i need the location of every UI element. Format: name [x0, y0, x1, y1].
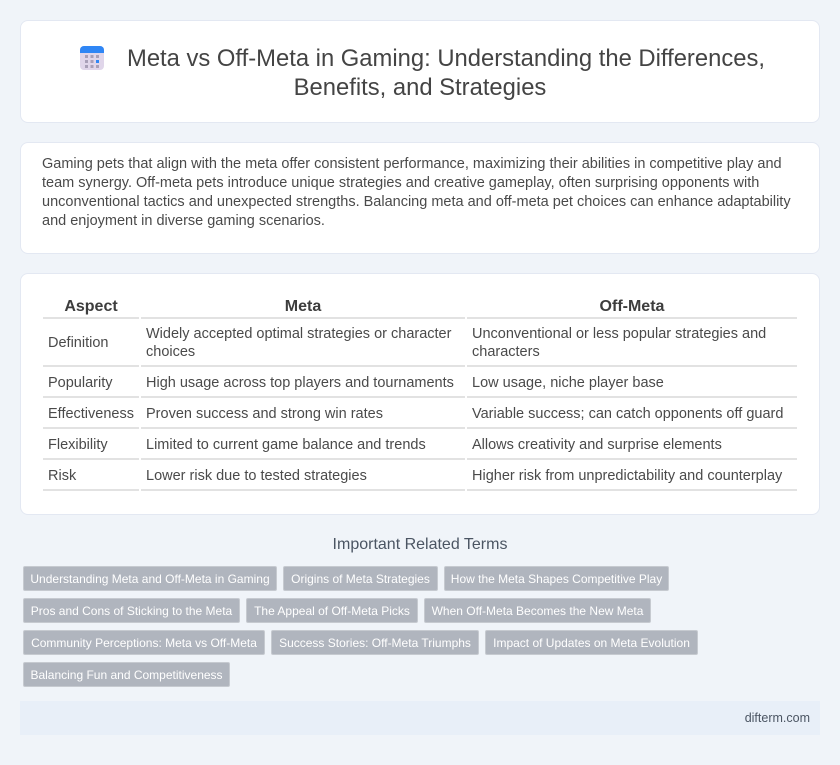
row: effectiveness: Effectiveness [48, 406, 134, 422]
intro paragraph: team synergy. Off-meta pets introduce unique strategies and creative gameplay, often surprising opponents with [42, 175, 759, 191]
row: definition: Widely accepted optimal strategies or character [146, 326, 451, 342]
tag [283, 566, 438, 591]
row: effectiveness [48, 406, 783, 422]
row: risk: Lower risk due to tested strategies [146, 468, 367, 484]
row: risk [48, 468, 782, 484]
tag: The Appeal of Off-Meta Picks [254, 604, 410, 618]
tag [23, 598, 240, 623]
related terms heading: Important Related Terms [333, 536, 507, 553]
tag [424, 598, 651, 623]
row: effectiveness: Variable success; can catch opponents off guard [472, 406, 783, 422]
title: Meta vs Off-Meta in Gaming: Understanding the Differences, [127, 45, 765, 72]
tag [485, 630, 698, 655]
row: popularity: Popularity [48, 375, 112, 391]
footer credit: difterm.com [745, 711, 810, 725]
tag: Pros and Cons of Sticking to the Meta [31, 604, 232, 618]
intro paragraph: Gaming pets that align with the meta offer consistent performance, maximizing their abilities in competitive play and [42, 156, 782, 172]
tag: Success Stories: Off-Meta Triumphs [279, 636, 471, 650]
table headers: Off-Meta [600, 298, 664, 315]
row: flexibility: Flexibility [48, 437, 108, 453]
header card [20, 20, 820, 123]
row: risk: Higher risk from unpredictability and counterplay [472, 468, 782, 484]
row: flexibility [48, 437, 722, 453]
table headers: Meta [285, 298, 321, 315]
tag [23, 566, 277, 591]
tag: When Off-Meta Becomes the New Meta [432, 604, 643, 618]
intro paragraph [42, 156, 791, 229]
tag: Balancing Fun and Competitiveness [30, 668, 223, 682]
related terms tags [23, 566, 698, 687]
tag [23, 662, 230, 687]
tag [444, 566, 669, 591]
icon: calendar [80, 46, 104, 70]
table headers [64, 298, 664, 315]
tag: Community Perceptions: Meta vs Off-Meta [31, 636, 257, 650]
footer bar [20, 701, 820, 735]
intro paragraph: and enjoyment in diverse gaming scenarios. [42, 213, 325, 229]
row: effectiveness: Proven success and strong win rates [146, 406, 383, 422]
title [127, 45, 765, 101]
tag: Understanding Meta and Off-Meta in Gaming [30, 572, 270, 586]
row: risk: Risk [48, 468, 76, 484]
row: popularity [48, 375, 664, 391]
row: definition: choices [146, 344, 195, 360]
tag [23, 630, 265, 655]
row: definition: characters [472, 344, 540, 360]
row: definition: Unconventional or less popular strategies and [472, 326, 766, 342]
tag: Origins of Meta Strategies [291, 572, 430, 586]
title: Benefits, and Strategies [294, 74, 546, 101]
intro paragraph card [20, 142, 820, 254]
comparison table [43, 298, 797, 491]
tag [246, 598, 418, 623]
row: flexibility: Allows creativity and surprise elements [472, 437, 722, 453]
table headers: Aspect [64, 298, 118, 315]
row: definition: Definition [48, 335, 108, 351]
intro paragraph: unconventional tactics and unexpected strengths. Balancing meta and off-meta pet choices can enhance adaptability [42, 194, 791, 210]
tag: How the Meta Shapes Competitive Play [451, 572, 662, 586]
row: popularity: Low usage, niche player base [472, 375, 664, 391]
row: popularity: High usage across top players and tournaments [146, 375, 454, 391]
row: definition [48, 326, 766, 360]
table card [20, 273, 820, 515]
row: flexibility: Limited to current game balance and trends [146, 437, 426, 453]
tag [271, 630, 479, 655]
tag: Impact of Updates on Meta Evolution [493, 636, 690, 650]
